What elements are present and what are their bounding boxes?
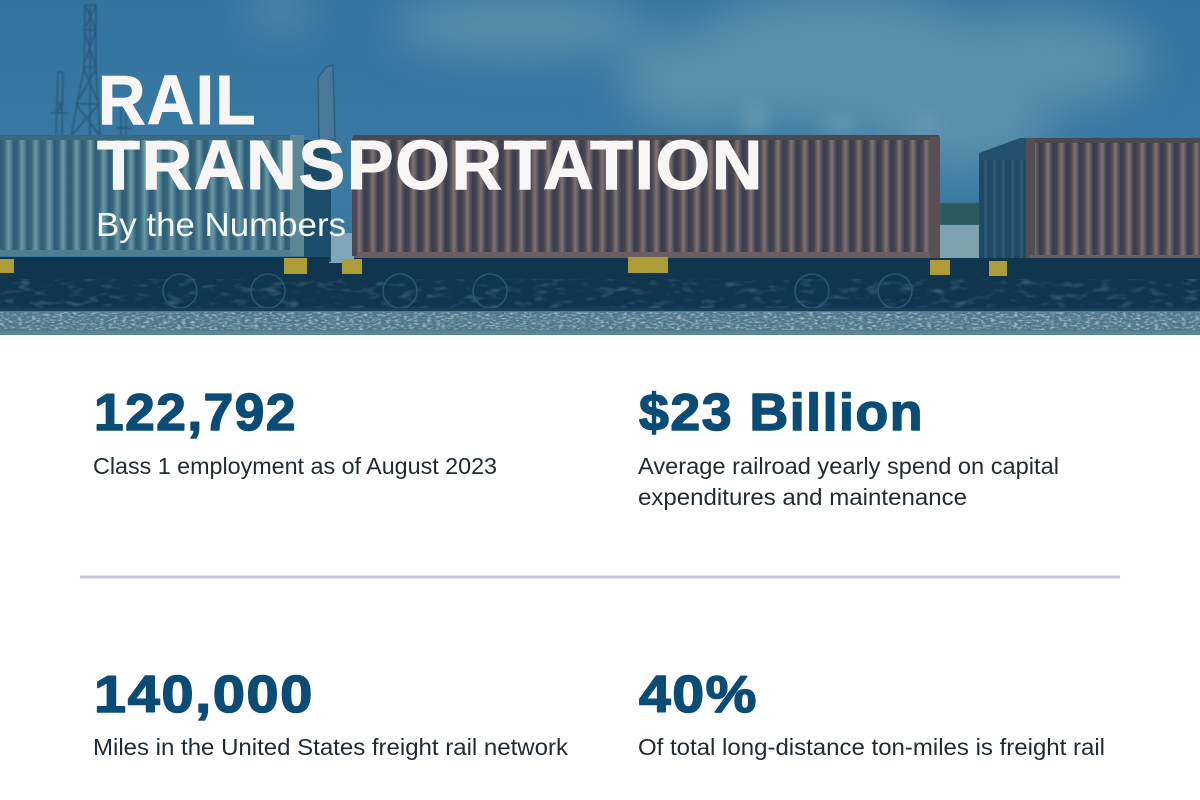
description	[638, 453, 1059, 510]
description: Class 1 employment as of August 2023	[93, 453, 497, 479]
panel: stat capital spend	[638, 384, 1059, 510]
number: 122,792	[94, 384, 297, 442]
track ballast gravel	[0, 308, 1200, 335]
yellow car blocks	[0, 257, 1007, 276]
gap window between cars	[329, 233, 354, 263]
panel: hero photo header	[0, 0, 1200, 335]
description: Of total long-distance ton-miles is freight rail	[638, 734, 1105, 760]
sky background	[0, 0, 1200, 335]
description: Average railroad yearly spend on capital	[638, 453, 1059, 479]
clouds	[245, 0, 1150, 170]
number: 40%	[639, 666, 758, 724]
title: RAIL	[98, 61, 257, 139]
description: Miles in the United States freight rail network	[93, 734, 568, 760]
wheels and bogies	[163, 274, 912, 308]
small cloud puffs	[741, 100, 939, 137]
white building	[940, 225, 980, 263]
left teal container	[0, 135, 331, 262]
number: $23 Billion	[639, 384, 924, 442]
title: TRANSPORTATION	[97, 126, 764, 204]
panel: stat ton-miles share	[638, 666, 1105, 760]
subtitle: By the Numbers	[96, 206, 346, 243]
number: 140,000	[94, 666, 314, 724]
panel: stat network miles	[93, 666, 568, 760]
title	[97, 61, 764, 204]
middle brown container	[352, 135, 940, 259]
communication towers	[51, 5, 132, 136]
pole structure	[318, 65, 335, 140]
tree line	[940, 203, 982, 225]
panel: stat employment	[93, 384, 497, 479]
description: expenditures and maintenance	[638, 484, 967, 510]
right brown container	[979, 138, 1200, 260]
railcar undercarriage	[0, 257, 1200, 310]
